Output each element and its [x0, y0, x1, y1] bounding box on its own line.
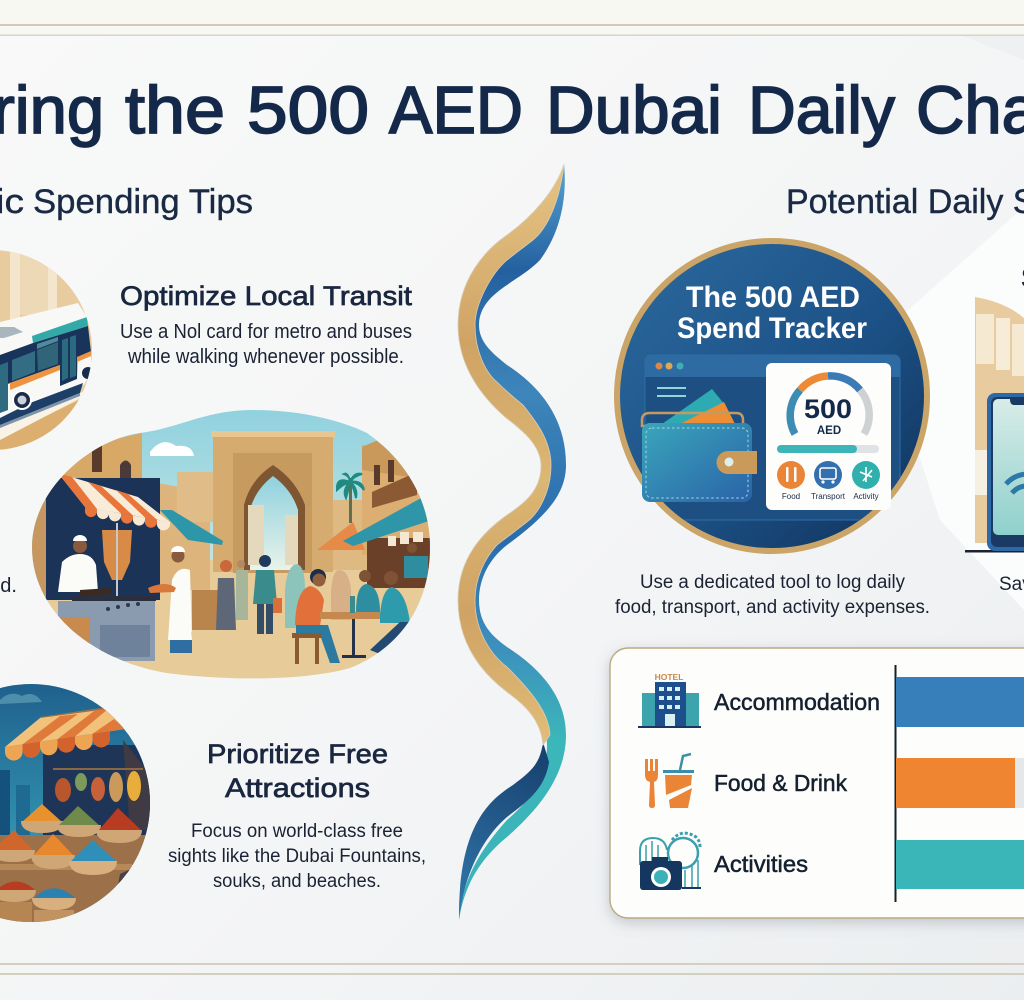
- gauge: [790, 376, 869, 434]
- icon: transport: [814, 461, 842, 489]
- title: [0, 73, 1024, 148]
- text: prioritize free attractions: Focus on world-class free: [191, 821, 403, 842]
- icon labels: Transport: [811, 492, 846, 501]
- icon labels: Activity: [853, 492, 879, 501]
- icon: activities: [640, 833, 701, 890]
- text: prioritize free attractions: sights like the Dubai Fountains,: [168, 846, 426, 867]
- title: Daily: [748, 73, 895, 148]
- icon labels: [782, 492, 879, 501]
- text: prioritize free attractions: Prioritize Free: [207, 739, 388, 769]
- text: optimize local transit: while walking whenever possible.: [127, 346, 404, 368]
- icon: food and drink: [645, 754, 694, 808]
- category labels: Activities: [714, 851, 808, 877]
- browser window: [645, 355, 900, 520]
- text: use a dedicated tool: Use a dedicated tool to log daily: [640, 572, 905, 593]
- badge heading: [677, 281, 867, 345]
- title: 500: [247, 73, 369, 148]
- panel: daily budget chart: [610, 648, 1024, 918]
- top double border: [0, 24, 1024, 36]
- text: use a dedicated tool: food, transport, and activity expenses.: [615, 597, 930, 618]
- text: prioritize free attractions: [168, 739, 426, 892]
- gauge value: [804, 394, 852, 437]
- category labels: Food & Drink: [714, 770, 847, 796]
- title: AED: [389, 73, 523, 148]
- icon: phone wifi illustration: [965, 297, 1024, 552]
- title: the: [125, 73, 225, 148]
- text: prioritize free attractions: Attractions: [225, 773, 370, 803]
- gauge value: 500: [804, 394, 852, 424]
- heading: spending tips: Spending Tips: [33, 183, 253, 221]
- text: prioritize free attractions: souks, and beaches.: [213, 871, 381, 892]
- category labels: [714, 689, 880, 877]
- icon: wallet: [642, 389, 757, 502]
- text: use a dedicated tool: [615, 572, 930, 618]
- icon: bus illustration: [0, 250, 92, 450]
- illustration: souk food market: [30, 405, 435, 685]
- icon: hotel: HOTEL: [655, 672, 683, 682]
- title: Dubai: [546, 73, 722, 148]
- tracker badge: [617, 241, 927, 551]
- icon: activity: [852, 461, 880, 489]
- gauge value: AED: [817, 425, 841, 437]
- icon: spice market illustration: [0, 680, 155, 932]
- badge heading: The 500 AED: [686, 281, 860, 314]
- ribbon divider: [458, 164, 566, 920]
- text: optimize local transit: Use a Nol card for metro and buses: [120, 321, 412, 343]
- progress bar: [777, 445, 879, 453]
- text: optimize local transit: Optimize Local Transit: [120, 281, 413, 311]
- bar chart: [894, 665, 1024, 902]
- bottom double border: [0, 963, 1024, 975]
- text: optimize local transit: [120, 281, 413, 368]
- icon labels: Food: [782, 492, 800, 501]
- icon: food: [777, 461, 805, 489]
- icon: hotel: [638, 672, 701, 728]
- badge heading: Spend Tracker: [677, 312, 867, 345]
- tracker card: [766, 363, 891, 510]
- category labels: Accommodation: [714, 689, 880, 715]
